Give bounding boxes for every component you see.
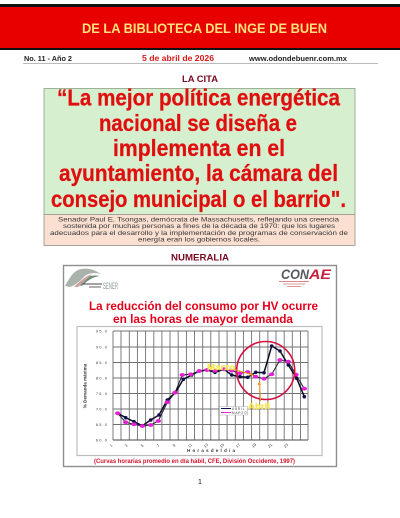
panel: quote [44, 85, 355, 214]
highlight circle [237, 342, 295, 400]
x axis title: H o r a s d e l d í a [187, 448, 236, 453]
panel: quote attribution: adecuados para el desarrollo y la implementación de programas de conservación de [50, 230, 348, 237]
series: april line [116, 344, 306, 428]
y axis labels: 6 5 . 0 [96, 422, 108, 427]
issue information bar: No. 11 - Año 2 [24, 56, 72, 63]
panel: quote attribution: sostenida por muchas personas a fines de la década de 1970: que los lugares [63, 223, 336, 230]
header banner: DE LA BIBLIOTECA DEL INGE DE BUEN [82, 20, 327, 36]
grid lines [113, 331, 308, 440]
panel: quote: “La mejor política energética [57, 85, 340, 111]
label: abril with arrow [248, 381, 270, 411]
y axis labels: 9 0 . 0 [96, 344, 108, 350]
chart caption: (Curvas horarias promedio en día hábil, CFE, División Occidente, 1997) [94, 458, 295, 465]
chart title: en las horas de mayor demanda [113, 314, 294, 326]
legend: A B R I L [232, 407, 245, 411]
x axis labels: 11 [187, 442, 194, 449]
icon: secretaria de energia logo [65, 269, 118, 291]
x axis labels: 5 [139, 442, 145, 448]
x axis labels: 15 [219, 442, 226, 449]
y axis labels: 6 0 . 0 [96, 438, 108, 442]
y axis labels: 7 0 . 0 [96, 406, 108, 412]
panel: quote attribution: energía eran los gobiernos locales. [138, 237, 260, 244]
x axis labels [108, 442, 290, 449]
x axis labels: 19 [251, 442, 258, 449]
x axis labels: 17 [235, 442, 242, 449]
heading: la cita: LA CITA [182, 74, 218, 85]
y axis labels: 8 5 . 0 [96, 360, 108, 365]
label: marzo with arrow: Marzo [207, 362, 235, 372]
panel: quote: implementa en el [113, 135, 285, 161]
icon: conae logo: CON [281, 266, 310, 282]
y axis labels: 8 0 . 0 [96, 376, 108, 380]
y axis labels: 7 5 . 0 [96, 391, 108, 396]
x axis labels: 3 [123, 442, 129, 448]
panel: chart slide [64, 266, 336, 466]
y axis title: % Demanda máxima [82, 363, 88, 408]
x axis labels: 9 [171, 442, 177, 448]
series: march line [115, 358, 307, 428]
label: abril with arrow: Abril [248, 401, 270, 411]
panel: chart slide: SENER [103, 281, 118, 291]
line chart [77, 326, 322, 456]
chart title [89, 301, 318, 326]
x axis labels: 1 [108, 442, 114, 448]
legend [220, 406, 248, 415]
panel: quote: consejo municipal o el barrio". [51, 186, 346, 212]
x axis labels: 7 [155, 442, 161, 448]
x axis labels: 21 [267, 442, 274, 449]
panel: quote: ayuntamiento, la cámara del [59, 160, 338, 186]
panel: quote attribution [44, 214, 355, 246]
icon: conae logo: AE [308, 266, 332, 282]
heading: numeralia: NUMERALIA [171, 252, 229, 264]
y axis labels: 9 5 . 0 [96, 328, 108, 334]
x axis labels: 13 [203, 442, 210, 449]
panel: quote attribution: Senador Paul E. Tsongas, demócrata de Massachusetts, reflejando una creencia [58, 216, 339, 224]
legend: M A R Z O [232, 411, 247, 415]
page number: 1 [198, 477, 202, 486]
label: marzo with arrow [207, 362, 254, 376]
x axis labels: 23 [283, 442, 290, 449]
header banner [0, 4, 400, 50]
issue information bar [23, 54, 378, 64]
y axis labels [96, 328, 108, 442]
issue information bar: www.odondebuenr.com.mx [248, 56, 347, 63]
issue information bar: 5 de abril de 2026 [142, 54, 215, 63]
chart title: La reducción del consumo por HV ocurre [89, 301, 318, 313]
panel: quote: nacional se diseña e [99, 110, 297, 136]
icon: conae logo [279, 266, 332, 287]
